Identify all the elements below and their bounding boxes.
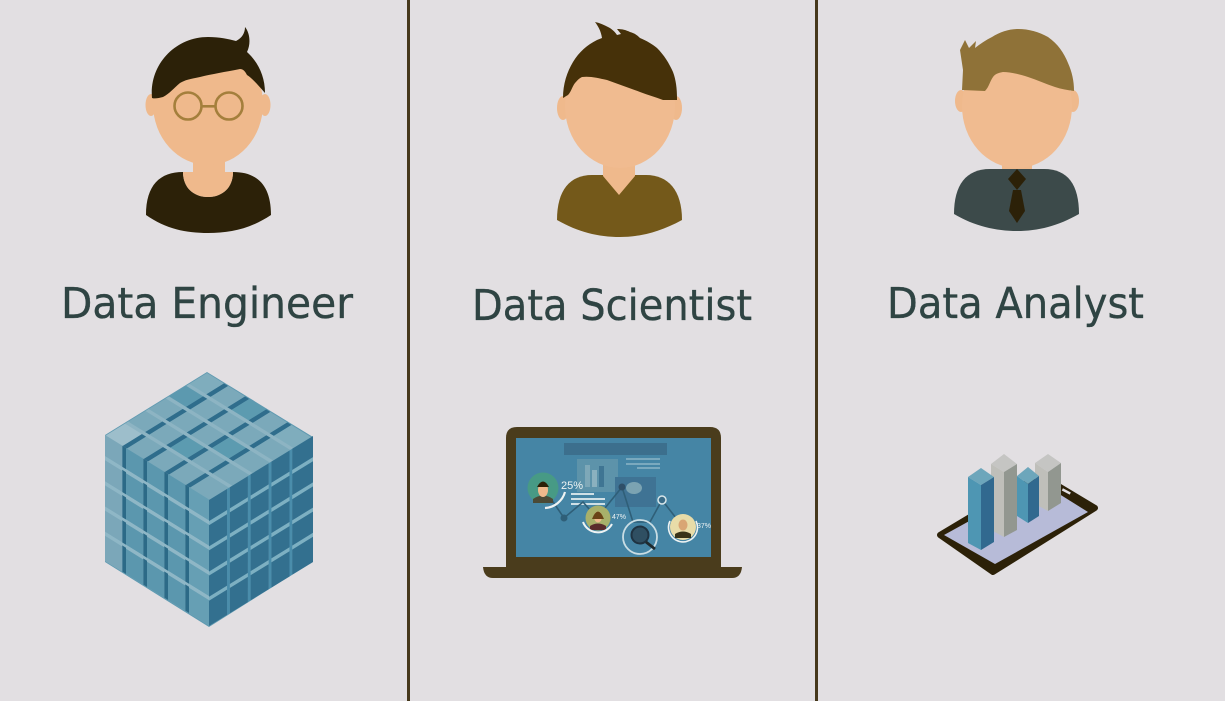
laptop body: [506, 427, 721, 568]
icon: data cube: [105, 372, 313, 627]
icon: data scientist avatar: [557, 22, 682, 237]
laptop screen: 25%: [561, 480, 583, 492]
bar: back grey left: [991, 454, 1017, 537]
laptop screen: [516, 438, 711, 557]
bar: back grey right: [1035, 454, 1061, 511]
heading: data engineer: Data Engineer: [61, 279, 353, 329]
panel: data scientist: [472, 22, 752, 578]
bar: blue middle: [1017, 467, 1039, 523]
laptop screen: 37%: [697, 523, 711, 530]
bar: blue front: [968, 468, 994, 550]
phone: [940, 475, 1095, 572]
heading: data analyst: Data Analyst: [887, 279, 1144, 329]
icon: data analyst avatar: [954, 29, 1079, 231]
icon: data engineer avatar: [146, 27, 271, 233]
panel: data engineer: [61, 27, 353, 627]
panel: data analyst: [887, 29, 1144, 572]
icon: phone with 3d bars: [940, 454, 1095, 572]
heading: data scientist: Data Scientist: [472, 281, 752, 331]
icon: laptop with dashboard: [483, 427, 742, 578]
laptop screen: 47%: [612, 514, 626, 521]
laptop base: [483, 567, 742, 578]
